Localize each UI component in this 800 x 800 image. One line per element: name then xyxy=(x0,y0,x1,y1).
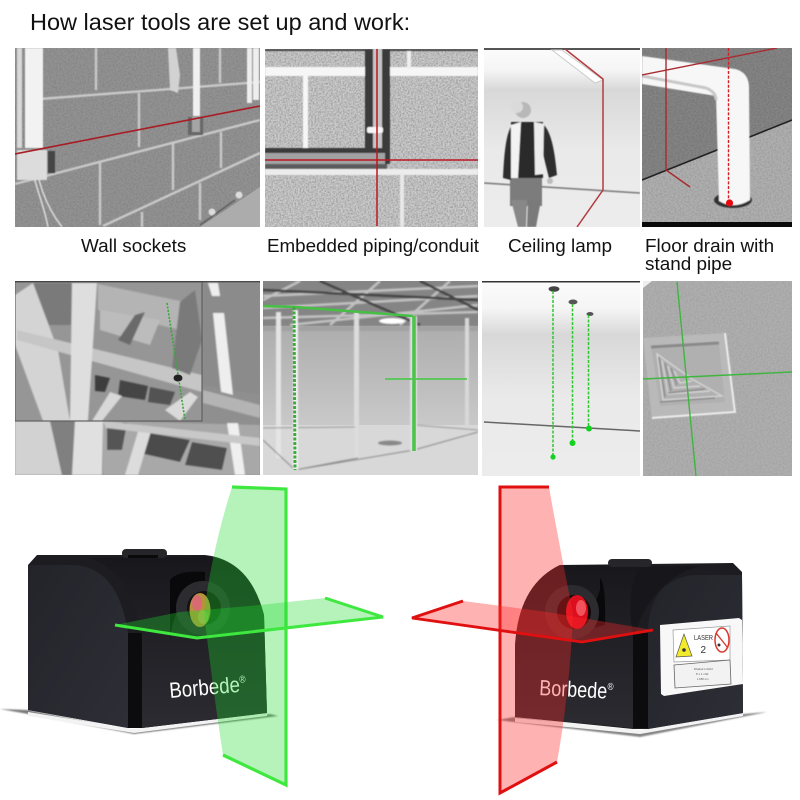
laser warning label: λ 650 nm xyxy=(697,677,709,681)
ceiling fixtures xyxy=(548,286,594,316)
green cross lines xyxy=(643,282,792,476)
brand: ® xyxy=(607,682,614,693)
device: green laser level xyxy=(0,487,383,785)
panel: timber frame photo xyxy=(15,281,260,475)
green dotted line xyxy=(167,303,185,420)
panel: floor drain photo xyxy=(642,48,792,227)
floor shadow xyxy=(497,712,767,737)
panel: ceiling plumb points photo xyxy=(482,280,640,476)
lens xyxy=(545,585,599,639)
green vertical laser plane xyxy=(204,487,287,785)
icon: laser warning triangle xyxy=(676,634,692,657)
red laser dot xyxy=(726,199,733,207)
label: floor drain: Floor drain with xyxy=(645,236,774,257)
device: red laser level xyxy=(412,487,767,793)
red horizontal laser plane xyxy=(412,601,653,642)
red cross lines xyxy=(265,49,478,226)
laser warning label: 2 xyxy=(700,645,706,656)
green horizontal laser plane xyxy=(115,598,383,638)
green dots xyxy=(550,426,592,460)
panel: wall sockets photo xyxy=(15,48,260,227)
laser warning label: P ≤ 1 mW xyxy=(696,672,709,676)
green laser frame xyxy=(263,306,413,316)
magnified inset xyxy=(15,282,202,421)
label: ceiling lamp: Ceiling lamp xyxy=(508,236,612,257)
red laser line xyxy=(15,106,260,154)
title: How laser tools are set up and work: xyxy=(30,9,410,35)
housing xyxy=(28,549,267,728)
vent xyxy=(643,333,735,418)
brand: Borbede xyxy=(539,675,623,704)
stand pipe xyxy=(642,56,752,208)
laser warning label: LASER xyxy=(694,633,713,642)
green dotted upright xyxy=(294,307,295,470)
green laser upright xyxy=(412,316,416,451)
brand: Borbede xyxy=(168,671,253,703)
brand: ® xyxy=(239,674,247,686)
laser warning label: Divided 1:2014 xyxy=(694,667,713,671)
red laser line xyxy=(565,49,603,227)
laser warning label xyxy=(660,618,743,696)
icon: do not look sign xyxy=(715,628,729,652)
housing xyxy=(515,559,743,729)
label: embedded piping: Embedded piping/conduit xyxy=(267,235,480,256)
panel: ceiling lamp photo xyxy=(484,48,640,227)
red vertical laser plane xyxy=(499,487,573,793)
green plumb lines xyxy=(553,291,588,457)
panel: room frame photo xyxy=(263,281,478,475)
hole marker xyxy=(174,374,182,382)
red laser lines xyxy=(642,48,777,201)
panel: ceiling vent photo xyxy=(643,281,792,476)
panel: embedded piping photo xyxy=(265,49,478,227)
green cross line xyxy=(385,378,467,380)
label: wall sockets: Wall sockets xyxy=(81,236,186,257)
lens xyxy=(176,581,230,635)
floor shadow xyxy=(0,709,278,734)
person xyxy=(503,101,557,227)
label: floor drain: stand pipe xyxy=(645,254,732,275)
